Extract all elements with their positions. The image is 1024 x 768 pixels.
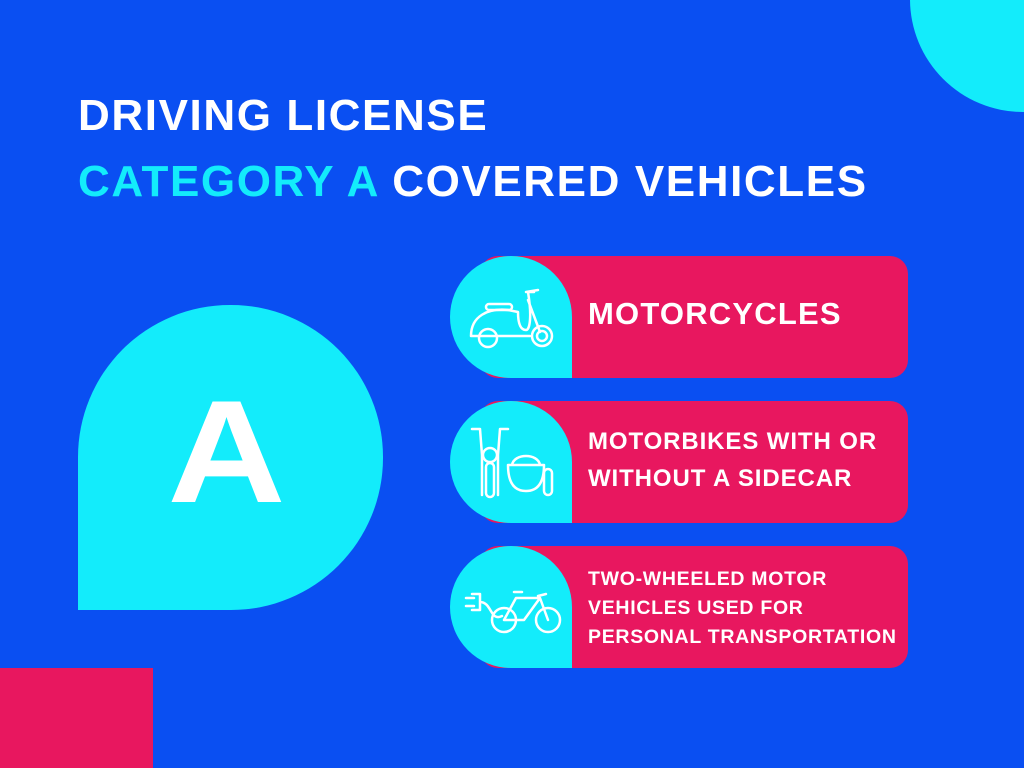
text: TWO-WHEELED MOTOR <box>588 568 827 590</box>
decor: pink square bottom left <box>0 668 153 768</box>
icon: sidecar <box>470 428 554 498</box>
decor: cyan circle top right <box>910 0 1024 112</box>
text: PERSONAL TRANSPORTATION <box>588 626 897 648</box>
text: MOTORBIKES WITH OR <box>588 428 877 455</box>
text <box>588 428 877 492</box>
badge: category A <box>78 305 383 610</box>
text: VEHICLES USED FOR <box>588 597 804 619</box>
card: motorbikes <box>450 401 908 523</box>
badge: category A: A <box>167 370 286 533</box>
title <box>78 91 868 206</box>
text: WITHOUT A SIDECAR <box>588 465 852 492</box>
card: motorcycles <box>450 256 908 378</box>
text: MOTORCYCLES <box>588 296 842 331</box>
icon: electric bicycle <box>464 590 562 634</box>
icon: scooter <box>470 288 554 348</box>
title: DRIVING LICENSE <box>78 91 488 140</box>
card: e-bikes <box>450 546 908 668</box>
title: CATEGORY A COVERED VEHICLES <box>78 157 868 206</box>
text <box>588 568 897 648</box>
